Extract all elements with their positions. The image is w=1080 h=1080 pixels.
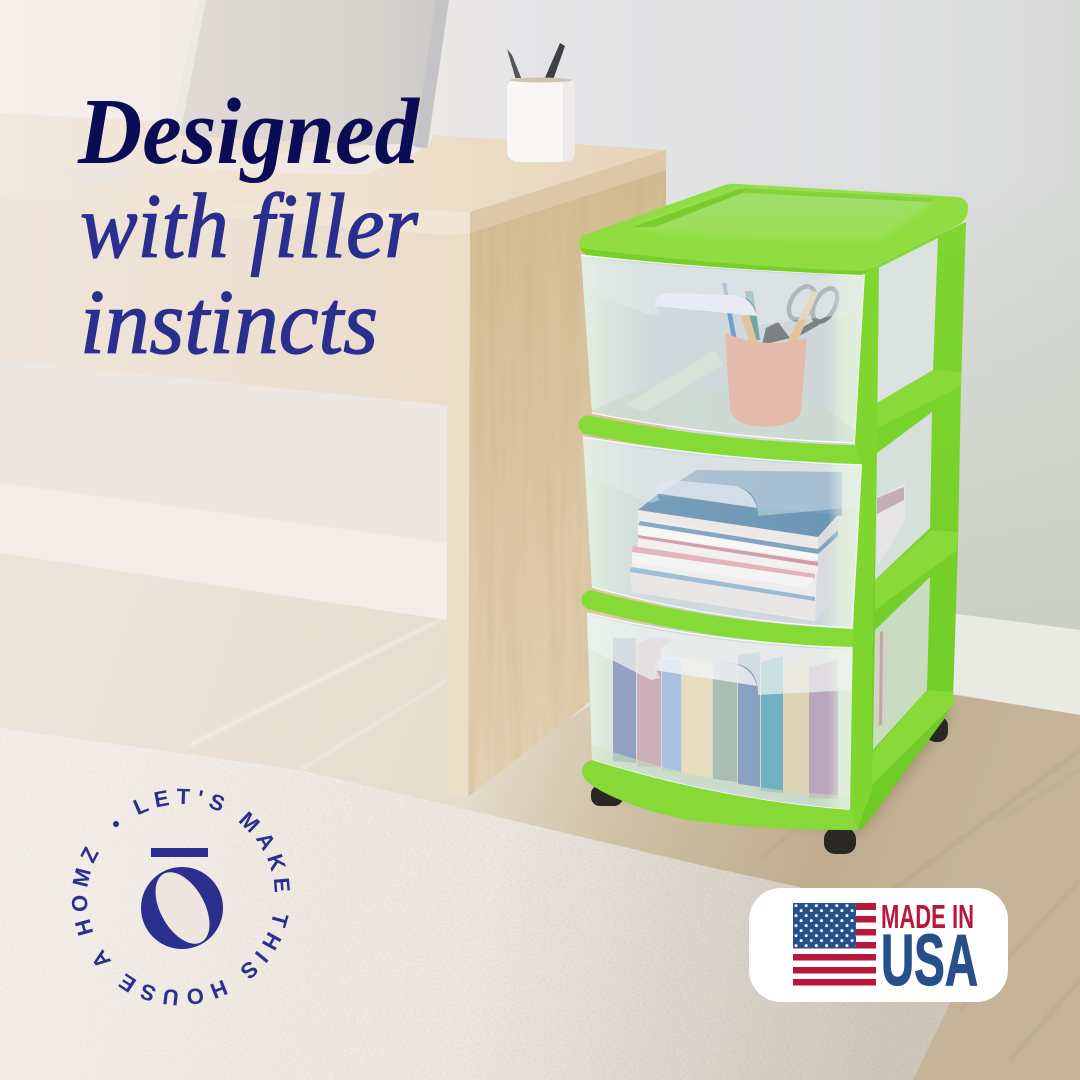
logo ring cutout — [144, 863, 221, 953]
lid back rim shadow — [742, 188, 936, 202]
book stack — [630, 495, 838, 621]
front post — [850, 268, 879, 828]
window 1 — [877, 238, 938, 403]
drawer unit — [579, 184, 968, 854]
drawer body — [581, 255, 865, 443]
book spines side — [815, 517, 838, 621]
drawer rim — [583, 437, 862, 628]
lid recess shadow — [633, 188, 745, 227]
back caster — [926, 716, 948, 742]
pen cup on desk — [507, 43, 575, 162]
usa text: USA — [881, 921, 978, 1001]
title line 1: Designed — [77, 80, 421, 184]
pencils in cup — [722, 283, 818, 345]
drawer lip — [587, 615, 859, 695]
drawer bottom tint — [592, 745, 850, 812]
side frame — [850, 222, 966, 830]
drawer rim — [581, 255, 865, 443]
flag icon — [793, 903, 876, 986]
bottom tray — [582, 752, 873, 830]
window 3 — [873, 577, 930, 750]
book 2 — [637, 636, 672, 768]
handle — [654, 293, 757, 316]
made in text: MADE IN — [881, 898, 974, 935]
logo macron — [151, 848, 208, 857]
white book — [638, 546, 818, 572]
book 5 — [713, 662, 737, 782]
desk side edge — [470, 150, 666, 233]
title — [77, 80, 421, 373]
desk top surface — [0, 113, 666, 212]
drawer lip — [584, 440, 861, 516]
frosted overlay — [587, 613, 860, 810]
middle drawer — [583, 437, 862, 628]
rug — [0, 728, 950, 1080]
books in side window 2 — [877, 484, 905, 566]
top book pages — [818, 544, 819, 547]
mouse on desk — [48, 165, 132, 182]
desk apron — [0, 200, 447, 405]
badge background — [749, 888, 1008, 1002]
drawer floor — [592, 385, 837, 441]
drawer lip — [582, 258, 864, 325]
drawer rim — [587, 613, 860, 810]
lid outer — [579, 184, 968, 274]
stack base — [630, 510, 838, 621]
book 7 — [761, 656, 783, 793]
floor — [0, 553, 1080, 1080]
upper crossbar — [877, 370, 961, 428]
handle — [654, 657, 757, 686]
title line 2: with filler — [80, 175, 419, 277]
separator dot — [113, 821, 119, 827]
pink book — [632, 552, 815, 588]
pink cup — [725, 333, 807, 427]
scissors — [786, 284, 840, 336]
top drawer — [581, 255, 865, 445]
drawer body — [587, 613, 860, 810]
casters — [591, 716, 948, 854]
book 8 — [783, 656, 810, 796]
made in usa badge — [749, 888, 1008, 1002]
laptop base — [135, 143, 423, 175]
logo ring — [141, 867, 223, 949]
desk leg front — [447, 233, 470, 797]
circular tagline: LET'S MAKE THIS HOUSE A HOMZ — [72, 788, 290, 1006]
bottom drawer — [587, 613, 860, 812]
left baseboard — [0, 483, 447, 620]
middle crossbar — [875, 530, 958, 610]
second book — [638, 525, 818, 560]
frosted overlay — [583, 437, 862, 628]
frosted overlay — [581, 255, 865, 443]
left caster — [591, 785, 623, 806]
background wall — [0, 0, 1080, 720]
window 2 — [875, 412, 932, 580]
book row — [613, 636, 838, 799]
lid recess — [633, 188, 936, 240]
laptop screen — [171, 0, 449, 150]
side windows — [873, 238, 938, 750]
frame highlight bars — [872, 370, 961, 785]
bottom crossbar — [872, 690, 955, 785]
desk side panel — [468, 170, 666, 797]
bottom book — [630, 570, 815, 620]
title line 3: instincts — [80, 271, 378, 373]
pens — [507, 49, 522, 80]
shadow behind unit — [600, 705, 950, 832]
right baseboard — [950, 613, 1080, 715]
book 1 — [613, 638, 636, 763]
top book cover — [638, 495, 838, 537]
book 4 — [682, 658, 712, 777]
desk — [0, 113, 666, 797]
upper shelf band — [588, 425, 866, 455]
lid front shade — [580, 248, 872, 275]
handle — [654, 480, 757, 508]
book 6 — [738, 652, 760, 787]
desk front edge — [0, 198, 470, 235]
book 3 — [662, 660, 681, 772]
drawer body — [583, 437, 862, 628]
folder behind books — [657, 470, 842, 516]
lower shelf band — [591, 600, 864, 639]
book 9 — [809, 660, 838, 799]
front caster — [824, 828, 856, 854]
logo badge — [72, 788, 290, 1006]
lid — [579, 184, 968, 275]
books in side window 3 — [875, 630, 888, 728]
side view books — [875, 484, 905, 728]
